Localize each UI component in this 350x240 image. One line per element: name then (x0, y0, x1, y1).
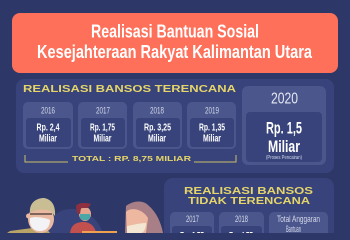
heading: unplanned aid (184, 186, 313, 207)
card: 2018: 2018 (150, 106, 164, 116)
card: 2016: Rp. 2,4 (36, 122, 60, 134)
card: 2016 (23, 102, 73, 149)
background blob (45, 209, 103, 233)
illustration: officials and aid recipient (7, 198, 163, 233)
card: unplanned 2017 (170, 212, 214, 240)
title banner: Realisasi Bantuan Sosial (91, 22, 259, 42)
title banner (12, 13, 338, 73)
card: 2017 (78, 102, 127, 149)
card: 2019: Rp. 1,35 (199, 122, 225, 134)
card: 2020 (242, 86, 326, 165)
panel: unplanned social aid (164, 178, 334, 240)
card: 2020: Miliar (268, 137, 300, 156)
card: 2020: 2020 (271, 90, 298, 108)
card: 2017: 2017 (96, 106, 110, 116)
card: 2016: 2016 (41, 106, 55, 116)
person: official in cap (7, 198, 55, 233)
heading: unplanned aid: TIDAK TERENCANA (188, 196, 310, 207)
planned total bracket (25, 155, 236, 163)
card: 2019: 2019 (205, 106, 219, 116)
heading: unplanned aid: REALISASI BANSOS (184, 186, 313, 197)
card: unplanned 2018: 2018 (235, 214, 248, 225)
card: 2016: Miliar (39, 132, 57, 144)
card: unplanned 2017: 2017 (186, 214, 199, 225)
card: 2019: Miliar (203, 132, 221, 144)
card: 2020: Rp. 1,5 (266, 118, 302, 138)
card: unplanned 2018 (219, 212, 264, 240)
panel: planned social aid (16, 79, 334, 173)
card: total aid budget: Total Anggaran (277, 214, 320, 225)
card: 2018: Rp. 3,25 (144, 122, 171, 134)
card: total aid budget (269, 212, 328, 240)
card: 2018: Miliar (148, 132, 166, 144)
card: 2017: Miliar (94, 132, 112, 144)
card: 2017: Rp. 1,75 (90, 122, 115, 134)
planned total bracket: TOTAL : RP. 8,75 MILIAR (72, 156, 191, 163)
card: 2018 (133, 102, 182, 149)
person: man in mask (70, 203, 117, 233)
heading: planned aid: REALISASI BANSOS TERENCANA (23, 84, 236, 95)
card: 2019 (187, 102, 236, 149)
card: 2020: (Proses Pencairan) (266, 155, 302, 161)
person: woman in hijab (125, 201, 163, 233)
